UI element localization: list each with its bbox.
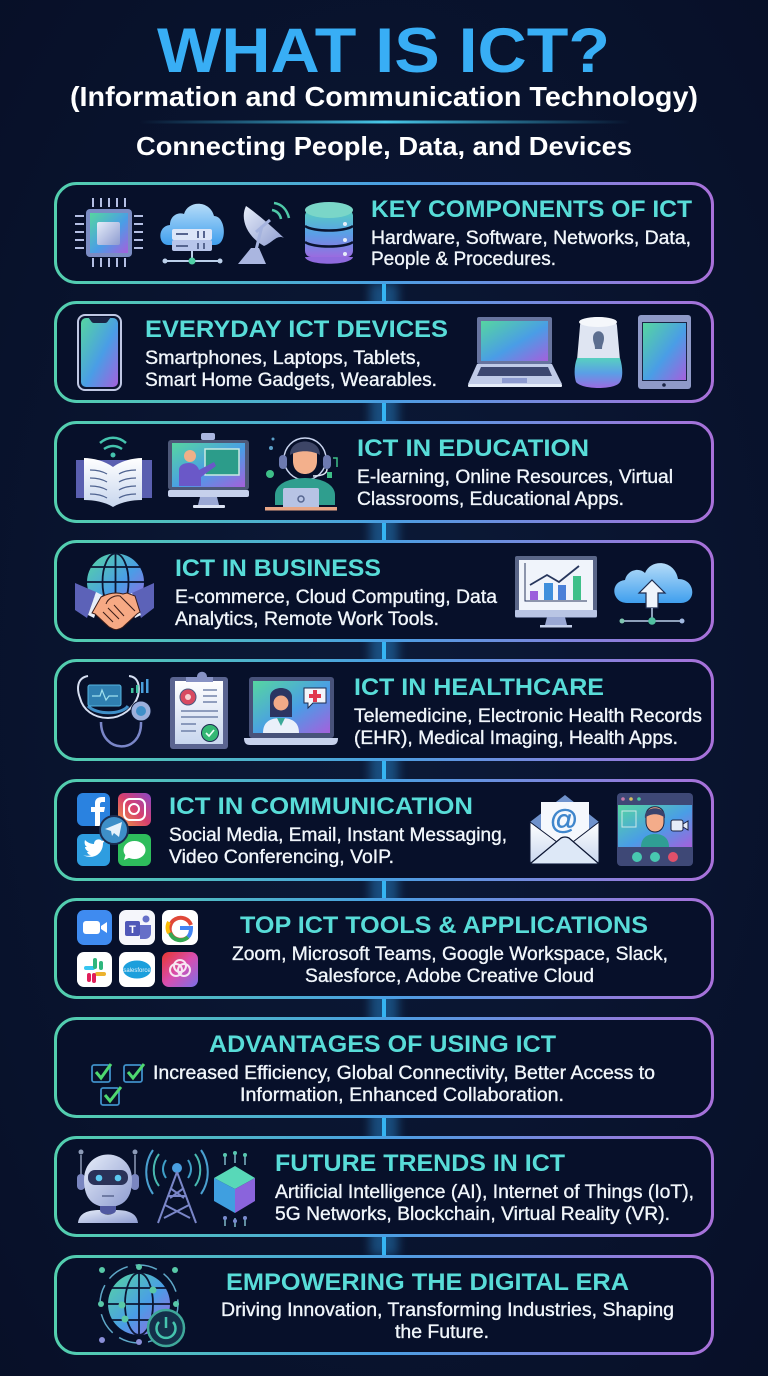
panel: tools	[56, 900, 712, 998]
icon: teacher on monitor	[168, 433, 249, 508]
description: the Future.	[395, 1322, 489, 1343]
heading: ADVANTAGES OF USING ICT	[209, 1031, 556, 1058]
description: Video Conferencing, VoIP.	[169, 847, 394, 868]
connector line between panels	[370, 283, 398, 1256]
icon: microchip	[75, 198, 143, 267]
description	[145, 348, 437, 391]
description: Hardware, Software, Networks, Data,	[371, 228, 691, 249]
panel: communication	[56, 780, 712, 880]
icon: email envelope: @	[550, 804, 578, 835]
description: Artificial Intelligence (AI), Internet of Things (IoT),	[275, 1182, 694, 1203]
icon: student with headset	[265, 438, 337, 510]
heading: ICT IN COMMUNICATION	[169, 793, 473, 820]
heading: EVERYDAY ICT DEVICES	[145, 316, 448, 343]
heading: ICT IN HEALTHCARE	[354, 674, 604, 701]
icon: analytics monitor	[515, 556, 597, 628]
icon: open book with wifi	[76, 438, 152, 507]
heading: FUTURE TRENDS IN ICT	[275, 1150, 565, 1177]
icon: smartphone	[78, 315, 121, 390]
description: Analytics, Remote Work Tools.	[175, 609, 439, 630]
description: Smart Home Gadgets, Wearables.	[145, 370, 437, 391]
heading: ICT IN EDUCATION	[357, 435, 589, 462]
description: (EHR), Medical Imaging, Health Apps.	[354, 728, 678, 749]
icon: tablet	[638, 315, 691, 389]
description	[153, 1063, 655, 1106]
icon: cloud upload	[614, 563, 692, 625]
description: Salesforce, Adobe Creative Cloud	[305, 966, 594, 987]
heading: TOP ICT TOOLS & APPLICATIONS	[240, 912, 648, 939]
icon: stethoscope	[78, 676, 151, 746]
description	[175, 587, 497, 630]
panel: key components	[56, 184, 712, 282]
icon: app logos: salesforce	[123, 968, 151, 974]
description: Zoom, Microsoft Teams, Google Workspace, Slack,	[232, 944, 668, 965]
title: WHAT IS ICT?	[157, 16, 610, 86]
description	[354, 706, 702, 749]
description	[169, 825, 507, 868]
icon: satellite dish	[238, 203, 289, 264]
panel: healthcare	[56, 660, 712, 760]
description: E-commerce, Cloud Computing, Data	[175, 587, 497, 608]
subtitle: (Information and Communication Technology)	[70, 81, 698, 112]
icon: globe and handshake	[75, 553, 154, 630]
description: Driving Innovation, Transforming Industries, Shaping	[221, 1300, 674, 1321]
description	[357, 467, 673, 510]
icon: cloud servers	[160, 204, 224, 264]
panel: empowering	[56, 1256, 712, 1354]
description	[275, 1182, 694, 1225]
panel: everyday devices	[56, 302, 712, 402]
heading: EMPOWERING THE DIGITAL ERA	[226, 1269, 629, 1296]
icon: 5G tower	[146, 1150, 208, 1223]
icon: laptop	[468, 317, 562, 387]
icon: robot	[77, 1150, 139, 1223]
icon: smart speaker	[575, 317, 622, 388]
panel: advantages	[56, 1018, 712, 1116]
description: Increased Efficiency, Global Connectivity, Better Access to	[153, 1063, 655, 1084]
description: Smartphones, Laptops, Tablets,	[145, 348, 421, 369]
description: Social Media, Email, Instant Messaging,	[169, 825, 507, 846]
description	[232, 944, 668, 987]
icon: app logos	[77, 910, 198, 987]
icon: email envelope	[530, 795, 599, 864]
heading: ICT IN BUSINESS	[175, 555, 381, 582]
description	[221, 1300, 674, 1343]
description: Information, Enhanced Collaboration.	[240, 1085, 564, 1106]
icon: video call window	[617, 793, 693, 866]
description: Classrooms, Educational Apps.	[357, 489, 624, 510]
icon: social media apps	[77, 793, 151, 866]
icon: app logos: T	[129, 924, 136, 936]
description: 5G Networks, Blockchain, Virtual Reality (VR).	[275, 1204, 670, 1225]
description	[371, 228, 691, 270]
description: People & Procedures.	[371, 249, 556, 270]
icon: telemedicine laptop	[244, 677, 338, 745]
icon: digital globe with power button	[98, 1264, 184, 1346]
description: E-learning, Online Resources, Virtual	[357, 467, 673, 488]
heading: KEY COMPONENTS OF ICT	[371, 196, 692, 223]
panel: future trends	[56, 1138, 712, 1236]
icon: medical clipboard	[170, 672, 228, 749]
tagline: Connecting People, Data, and Devices	[136, 131, 632, 161]
description: Telemedicine, Electronic Health Records	[354, 706, 702, 727]
icon: blockchain cube	[214, 1151, 255, 1227]
panel: business	[56, 542, 712, 640]
icon: checkboxes	[92, 1064, 144, 1105]
icon: database	[305, 202, 353, 264]
panel: education	[56, 422, 712, 522]
